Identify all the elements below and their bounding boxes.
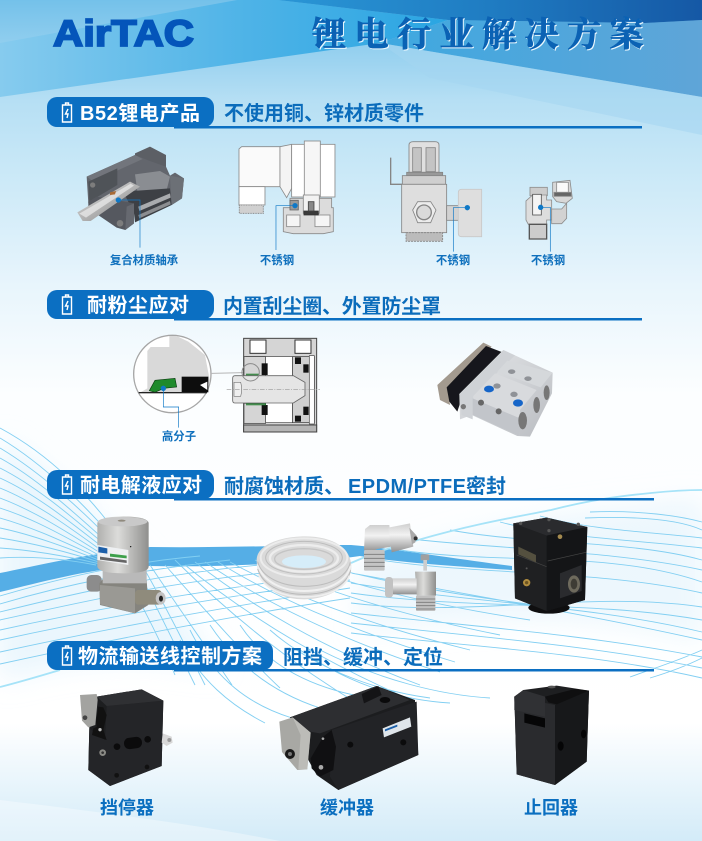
pill: dust resistance: 耐粉尘应对 — [87, 293, 189, 317]
product: solenoid valve drawing — [239, 141, 335, 250]
product: diaphragm valve — [87, 516, 166, 613]
pill: dust resistance — [47, 290, 214, 319]
product: stopper — [80, 689, 173, 786]
subtitle: 耐腐蚀材质、 — [224, 475, 344, 498]
subtitle — [224, 474, 506, 498]
label: polymer: 高分子 — [162, 429, 196, 443]
label: stainless steel: 不锈钢 — [436, 253, 470, 267]
label: stainless steel: 不锈钢 — [531, 253, 565, 267]
product: black valve block — [513, 518, 587, 614]
label: stopper: 挡停器 — [100, 797, 154, 818]
subtitle: EPDM/PTFE — [348, 476, 466, 498]
section 1 heading — [47, 97, 642, 128]
background mesh lines — [0, 428, 702, 723]
logo: AirTAC: AirTAC — [53, 13, 194, 54]
pill: B52 lithium products: B52锂电产品 — [80, 102, 200, 125]
pill: B52 lithium products — [47, 97, 214, 127]
flow control fitting — [385, 554, 436, 611]
pill: electrolyte resistance: 耐电解液应对 — [80, 473, 202, 497]
label: composite bearing: 复合材质轴承 — [110, 253, 179, 267]
subtitle: 不使用铜、锌材质零件 — [224, 102, 424, 125]
title: 锂电行业解决方案 — [312, 7, 652, 56]
section 3 heading — [47, 470, 654, 500]
pill: conveyor line control — [47, 641, 273, 670]
detail circle — [134, 335, 211, 428]
bright ribbons — [0, 490, 702, 687]
product: regulator drawing — [391, 142, 482, 252]
section 2 heading — [47, 290, 642, 320]
product: shock absorber — [279, 686, 418, 790]
subtitle: 阻挡、缓冲、定位 — [283, 645, 443, 669]
product: elbow fitting drawing — [526, 180, 572, 252]
product: guided cylinder with dust cover — [437, 343, 553, 437]
label: buffer: 缓冲器 — [320, 798, 374, 818]
label: check device: 止回器 — [524, 798, 578, 818]
label: stainless steel: 不锈钢 — [260, 253, 294, 267]
subtitle: 密封 — [466, 474, 506, 498]
product: check block — [514, 686, 589, 785]
section 4 heading — [47, 641, 654, 672]
pill: conveyor line control: 物流输送线控制方案 — [78, 644, 262, 668]
pill: electrolyte resistance — [47, 470, 214, 499]
subtitle: 内置刮尘圈、外置防尘罩 — [223, 295, 441, 318]
product: white tubing coil — [257, 536, 351, 599]
product: bearing cylinder — [77, 147, 184, 248]
cylinder section — [227, 338, 320, 432]
elbow fitting — [364, 523, 418, 571]
background wave band — [0, 545, 512, 592]
seal cross-section drawing — [134, 335, 320, 432]
product: stainless fittings — [364, 523, 436, 611]
